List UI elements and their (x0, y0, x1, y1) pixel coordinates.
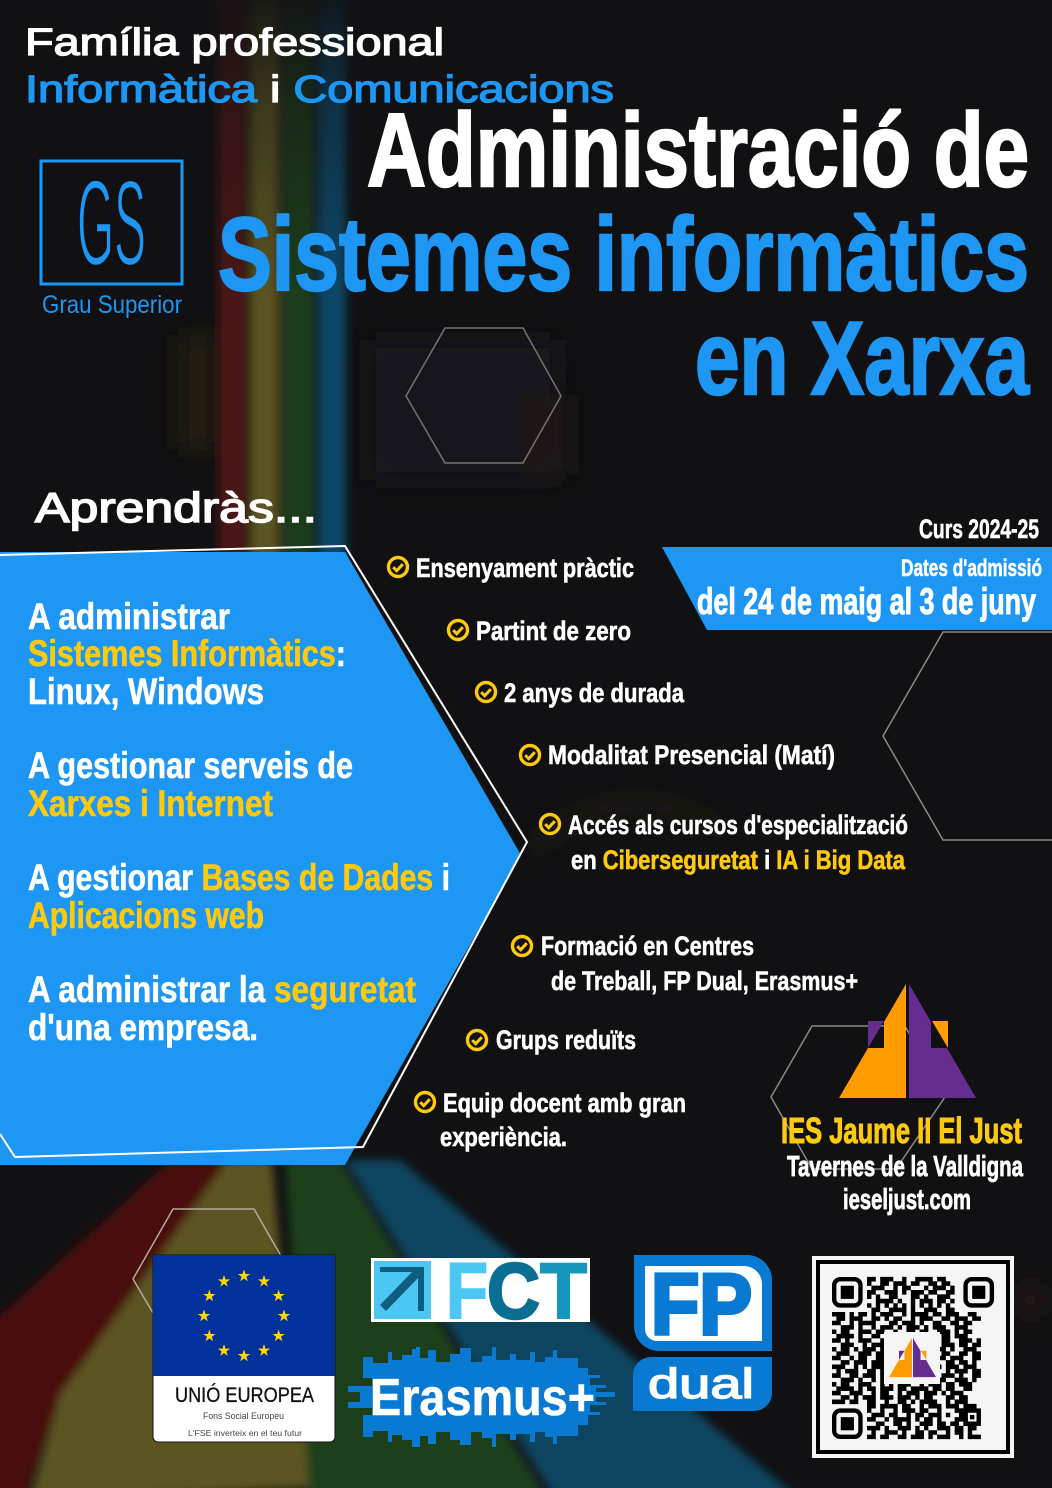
title (218, 93, 1030, 417)
logo: FCT (371, 1246, 590, 1335)
item: equip: experiència. (440, 1122, 567, 1152)
panel: what you will learn (0, 546, 527, 1165)
learning topic 2 (28, 745, 353, 824)
decorative hexagon outlines (133, 328, 1052, 1313)
learning topic 4: d'una empresa. (28, 1007, 258, 1048)
school logo (839, 984, 976, 1098)
learning topic 3 (28, 857, 450, 936)
learning topic 1: Sistemes Informàtics: (28, 633, 346, 674)
banner: admission dates (662, 547, 1052, 630)
header: professional family (25, 22, 614, 111)
item: especialització: Accés als cursos d'especialització (568, 810, 908, 840)
item: pràctic: Ensenyament pràctic (416, 553, 634, 583)
badge: GS Grau Superior: GS (77, 155, 146, 291)
logo: Unió Europea: UNIÓ EUROPEA (175, 1384, 314, 1407)
logo: Unió Europea: L'FSE inverteix en el teu futur (188, 1428, 302, 1438)
item: formació (512, 931, 858, 996)
item: formació: Formació en Centres (541, 931, 754, 961)
item: modalitat: Modalitat Presencial (Matí) (548, 740, 835, 770)
item: equip (416, 1088, 686, 1152)
QR code (812, 1256, 1014, 1458)
learning topic 1: Linux, Windows (28, 671, 264, 712)
learning topic 2: A gestionar serveis de (28, 745, 353, 786)
learning topic 4: A administrar la seguretat (28, 969, 416, 1010)
header: professional family: Família professional (25, 22, 444, 64)
learning topic 1 (28, 596, 346, 712)
school name and address: ieseljust.com (843, 1184, 971, 1216)
item: grups (468, 1025, 636, 1055)
item: zero: Partint de zero (476, 616, 631, 646)
learning topic 3: A gestionar Bases de Dades i (28, 857, 450, 898)
logo: FP dual: dual (648, 1360, 754, 1407)
logo: FCT: T (540, 1246, 587, 1335)
learning topic 4 (28, 969, 416, 1048)
item: formació: de Treball, FP Dual, Erasmus+ (551, 966, 858, 996)
logo: Unió Europea: Fons Social Europeu (203, 1411, 284, 1421)
school name and address (781, 1110, 1024, 1216)
logo: FCT: F (446, 1246, 488, 1335)
learning topic 2: Xarxes i Internet (28, 783, 273, 824)
heading: Aprendràs: Aprendràs... (35, 484, 317, 531)
logo: Erasmus+ (348, 1347, 615, 1447)
item: especialització (540, 810, 908, 875)
item: durada: 2 anys de durada (504, 678, 685, 708)
item: equip: Equip docent amb gran (443, 1088, 686, 1118)
learning topic 3: Aplicacions web (28, 895, 264, 936)
logo: FP dual: FP (651, 1257, 752, 1353)
item: grups: Grups reduïts (496, 1025, 636, 1055)
checklist (388, 553, 908, 1152)
learning topic 1: A administrar (28, 596, 230, 637)
item: especialització: en Ciberseguretat i IA i Big Data (571, 845, 906, 875)
logo: Erasmus+: Erasmus+ (370, 1369, 595, 1427)
badge: GS Grau Superior (41, 155, 182, 319)
logo: FP dual (633, 1255, 772, 1411)
logo: Unió Europea (153, 1255, 335, 1442)
logo: FCT: C (487, 1246, 540, 1335)
header: professional family: Informàtica i Comunicacions (25, 69, 614, 111)
badge: GS Grau Superior: Grau Superior (42, 291, 182, 319)
